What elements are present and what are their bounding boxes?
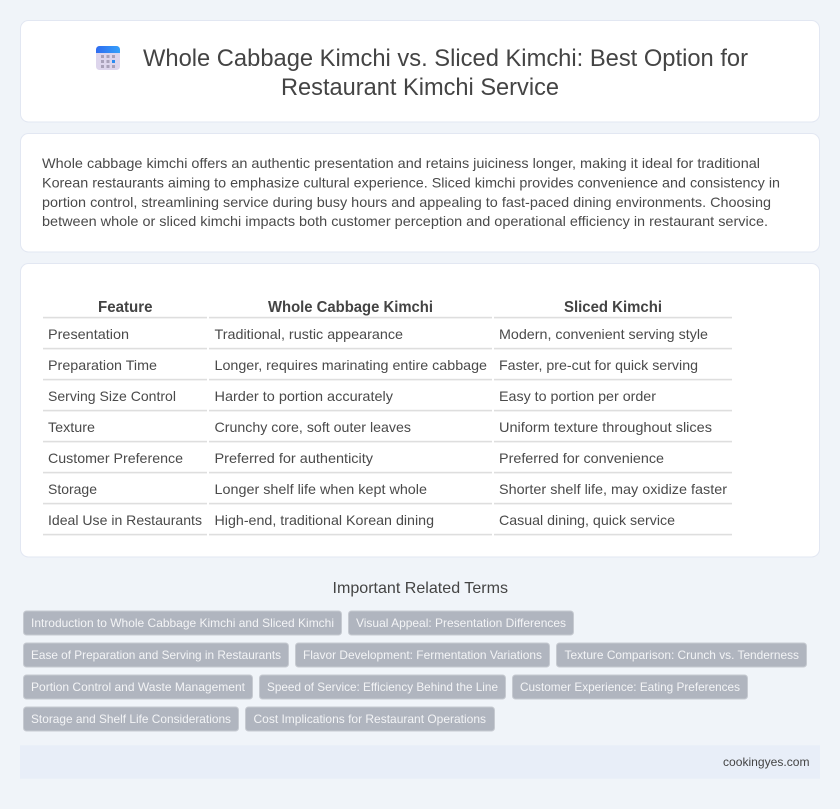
tag xyxy=(246,707,494,731)
table row: presentation: Modern, convenient serving style xyxy=(499,326,708,342)
table row: customer preference xyxy=(48,450,664,466)
table header row: Feature xyxy=(98,299,153,316)
icon: calendar grid xyxy=(96,46,120,70)
heading: important related terms: Important Related Terms xyxy=(332,580,508,597)
tag: Storage and Shelf Life Considerations xyxy=(31,712,231,726)
table row: presentation xyxy=(48,326,708,342)
tag: Visual Appeal: Presentation Differences xyxy=(356,616,566,630)
table row: storage: Storage xyxy=(48,481,97,497)
footer bar xyxy=(20,745,820,779)
tag: Customer Experience: Eating Preferences xyxy=(520,680,740,694)
table row: preparation time xyxy=(48,357,698,373)
text block: introduction: between whole or sliced kimchi impacts both customer perception and operational efficiency in restaurant service. xyxy=(42,213,768,229)
table row: ideal use: High-end, traditional Korean dining xyxy=(214,512,434,528)
title: Restaurant Kimchi Service xyxy=(281,74,559,101)
text block: introduction: portion control, streamlining service during busy hours and appealing to fast-paced dining environments. Choosing xyxy=(42,194,771,210)
table row: serving size control: Harder to portion accurately xyxy=(214,388,393,404)
tag xyxy=(260,675,506,699)
tag xyxy=(24,675,252,699)
table row: ideal use: Casual dining, quick service xyxy=(499,512,675,528)
tag: Cost Implications for Restaurant Operations xyxy=(254,712,486,726)
tag: Introduction to Whole Cabbage Kimchi and Sliced Kimchi xyxy=(31,616,334,630)
tag xyxy=(24,611,342,635)
text block: introduction: Whole cabbage kimchi offers an authentic presentation and retains juiciness longer, making it ideal for traditional xyxy=(42,155,760,171)
tag: Flavor Development: Fermentation Variations xyxy=(303,648,542,662)
table row: ideal use: Ideal Use in Restaurants xyxy=(48,512,202,528)
table row: storage xyxy=(48,481,727,497)
tag xyxy=(24,707,238,731)
tag xyxy=(296,643,550,667)
table row: presentation: Presentation xyxy=(48,326,129,342)
table row: texture: Texture xyxy=(48,419,95,435)
text block: introduction: Korean restaurants aiming to emphasize cultural experience. Sliced kimchi provides convenience and consistency in xyxy=(42,174,780,190)
table row: serving size control: Easy to portion per order xyxy=(499,388,656,404)
table row: customer preference: Preferred for authenticity xyxy=(214,450,373,466)
table row: texture xyxy=(48,419,712,435)
table row: preparation time: Preparation Time xyxy=(48,357,157,373)
table row: presentation: Traditional, rustic appearance xyxy=(214,326,403,342)
text block: introduction xyxy=(42,155,780,229)
table row: preparation time: Longer, requires marinating entire cabbage xyxy=(214,357,487,373)
table row: storage: Longer shelf life when kept whole xyxy=(214,481,427,497)
table row: preparation time: Faster, pre-cut for quick serving xyxy=(499,357,698,373)
footer source text: cookingyes.com xyxy=(723,755,810,769)
table header row xyxy=(98,299,662,316)
panel: related term tags xyxy=(24,611,806,731)
table row: texture: Crunchy core, soft outer leaves xyxy=(214,419,411,435)
table row: ideal use xyxy=(48,512,675,528)
panel: comparison table xyxy=(20,264,820,557)
title xyxy=(143,45,748,101)
tag xyxy=(24,643,288,667)
tag: Ease of Preparation and Serving in Restaurants xyxy=(31,648,281,662)
panel: introduction paragraph xyxy=(20,134,820,252)
tag: Portion Control and Waste Management xyxy=(31,680,246,694)
table row: customer preference: Preferred for convenience xyxy=(499,450,664,466)
table row: customer preference: Customer Preference xyxy=(48,450,183,466)
header panel xyxy=(20,20,820,122)
table row: texture: Uniform texture throughout slices xyxy=(499,419,712,435)
tag: Speed of Service: Efficiency Behind the Line xyxy=(267,680,498,694)
tag xyxy=(556,643,806,667)
table header row: Whole Cabbage Kimchi xyxy=(268,299,433,316)
tag xyxy=(512,675,748,699)
table row: storage: Shorter shelf life, may oxidize faster xyxy=(499,481,727,497)
table row: serving size control: Serving Size Control xyxy=(48,388,176,404)
tag: Texture Comparison: Crunch vs. Tenderness xyxy=(564,648,799,662)
table header row: Sliced Kimchi xyxy=(564,299,662,316)
table row: serving size control xyxy=(48,388,656,404)
title: Whole Cabbage Kimchi vs. Sliced Kimchi: Best Option for xyxy=(143,45,748,72)
tag xyxy=(348,611,574,635)
